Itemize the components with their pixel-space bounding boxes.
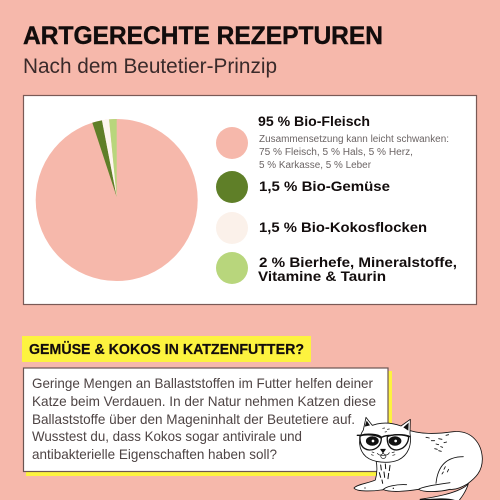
glasses bbox=[357, 434, 410, 450]
legend: Bierhefe bbox=[216, 252, 457, 284]
title: ARTGERECHTE REZEPTUREN bbox=[23, 22, 383, 50]
panel: composition bbox=[24, 96, 476, 304]
icon: cat with glasses bbox=[354, 417, 482, 500]
info box: Wusstest du, dass Kokos sogar antivirale und bbox=[32, 428, 302, 444]
legend: Bio-Kokosflocken: 1,5 % Bio-Kokosflocken bbox=[259, 219, 427, 235]
heading: Gemüse und Kokos bbox=[22, 336, 311, 362]
subtitle: Nach dem Beutetier-Prinzip bbox=[23, 55, 277, 78]
heading: Gemüse und Kokos: GEMÜSE & KOKOS IN KATZENFUTTER? bbox=[29, 341, 304, 358]
legend: Bio-Fleisch: 75 % Fleisch, 5 % Hals, 5 % Herz, bbox=[259, 147, 413, 158]
legend: Bio-Fleisch: 5 % Karkasse, 5 % Leber bbox=[259, 160, 372, 171]
legend: Bierhefe: Vitamine & Taurin bbox=[258, 268, 386, 284]
legend: Bio-Gemüse: 1,5 % Bio-Gemüse bbox=[259, 178, 390, 194]
legend: Bio-Gemüse bbox=[216, 171, 390, 203]
legend: Bio-Fleisch: Zusammensetzung kann leicht schwanken: bbox=[259, 134, 449, 145]
legend: Bio-Fleisch bbox=[216, 113, 449, 171]
legend: Bio-Fleisch: 95 % Bio-Fleisch bbox=[258, 113, 370, 129]
legend: Bierhefe: 2 % Bierhefe, Mineralstoffe, bbox=[259, 254, 457, 270]
pie chart bbox=[36, 119, 198, 281]
info box bbox=[24, 368, 392, 476]
legend: Bio-Kokosflocken bbox=[216, 212, 427, 244]
info box: Katze beim Verdauen. In der Natur nehmen Katzen diese bbox=[32, 393, 376, 409]
info box: antibakterielle Eigenschaften haben soll? bbox=[32, 446, 277, 462]
info box: Ballaststoffe über den Mageninhalt der Beutetiere auf. bbox=[32, 411, 355, 427]
info box: Geringe Mengen an Ballaststoffen im Futter helfen deiner bbox=[32, 375, 373, 391]
